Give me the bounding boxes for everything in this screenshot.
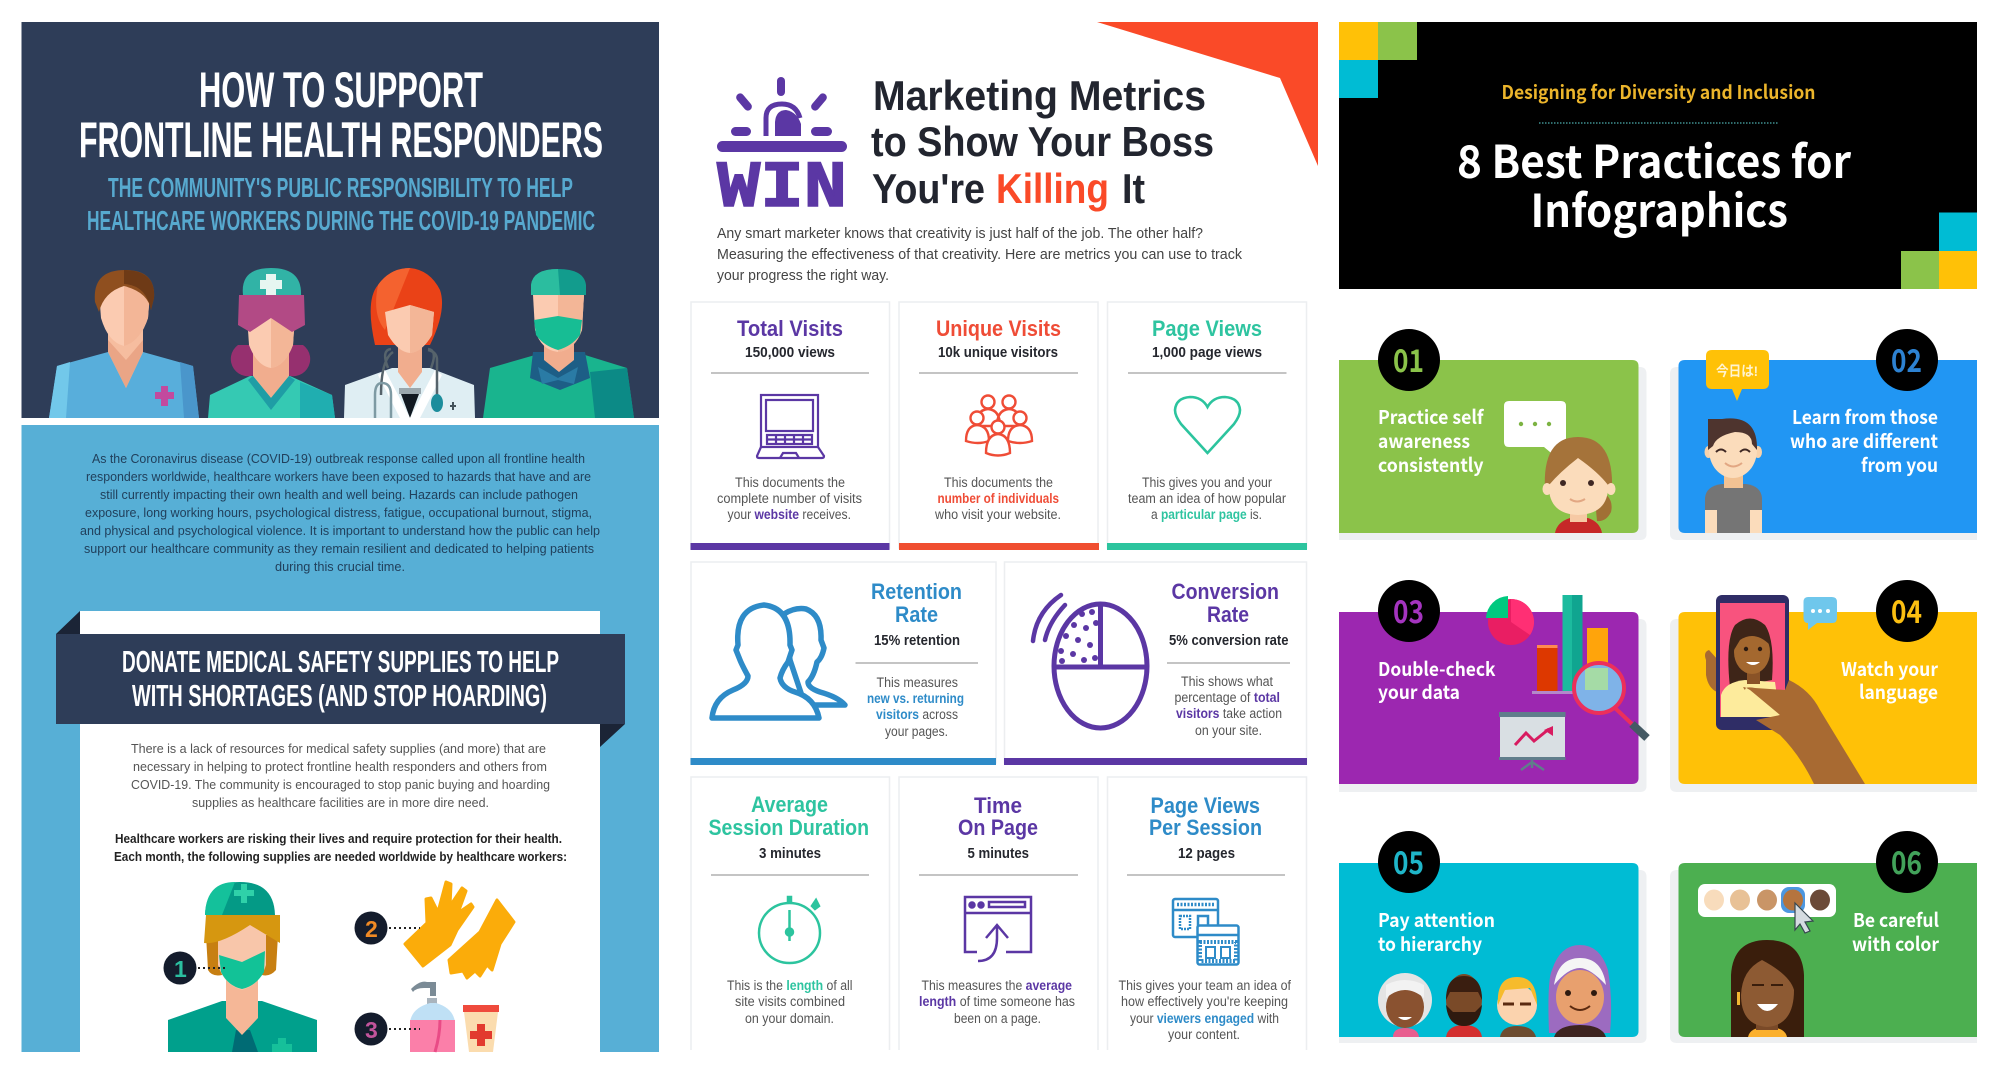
bold statement: Healthcare workers are risking their lives and require protection for their health. bbox=[115, 831, 562, 846]
chart: bars bbox=[1532, 595, 1612, 694]
icon: browser windows bbox=[1173, 899, 1238, 964]
banner title: 8 Best Practices for bbox=[1457, 126, 1851, 191]
card: page views per session: your content. bbox=[1168, 1027, 1240, 1042]
icon: presentation board bbox=[1499, 712, 1566, 770]
title: HOW TO SUPPORT bbox=[199, 62, 483, 118]
card: average session duration: site visits combined bbox=[735, 994, 845, 1009]
panel: marketing metrics bbox=[690, 22, 1318, 1050]
card 01: awareness bbox=[1378, 427, 1470, 454]
chart: pie bbox=[1486, 596, 1534, 645]
card: conversion rate: This shows what bbox=[1181, 674, 1273, 689]
figure: doctor with stethoscope bbox=[344, 268, 475, 418]
intro text: Any smart marketer knows that creativity is just half of the job. The other half? bbox=[717, 226, 1203, 242]
card: conversion rate: 5% conversion rate bbox=[1169, 633, 1288, 649]
card 05: 05 bbox=[1393, 838, 1424, 883]
card: page views per session: how effectively you're keeping bbox=[1121, 994, 1288, 1009]
card: time on page: This measures the average bbox=[922, 978, 1072, 993]
card: time on page: been on a page. bbox=[954, 1011, 1041, 1026]
card 03: your data bbox=[1378, 678, 1460, 705]
card 03: 03 bbox=[1393, 587, 1424, 632]
card 05: to hierarchy bbox=[1378, 930, 1482, 957]
card: conversion rate bbox=[1004, 562, 1307, 765]
bold statement: Each month, the following supplies are needed worldwide by healthcare workers: bbox=[114, 849, 567, 864]
card: page views: a particular page is. bbox=[1151, 507, 1262, 522]
card: retention rate: your pages. bbox=[885, 724, 948, 739]
card: conversion rate: Rate bbox=[1207, 602, 1249, 627]
intro text: Measuring the effectiveness of that creativity. Here are metrics you can use to track bbox=[717, 247, 1243, 263]
card: unique visits bbox=[899, 302, 1099, 550]
icon: yellow greeting bubble bbox=[1706, 350, 1769, 401]
title bbox=[79, 62, 603, 168]
card: page views per session bbox=[1108, 777, 1306, 1050]
icon: two busts bbox=[712, 605, 845, 718]
card: page views per session: Per Session bbox=[1149, 815, 1262, 840]
icon: heart bbox=[1175, 397, 1240, 453]
icon: laptop bbox=[757, 395, 824, 458]
card 05 bbox=[1339, 831, 1646, 1043]
illustration: phone in hand bbox=[1705, 595, 1865, 784]
title: Killing bbox=[996, 165, 1109, 212]
illustration: gloves bbox=[405, 882, 514, 978]
callout 3 bbox=[354, 1012, 420, 1046]
card: average session duration: 3 minutes bbox=[759, 846, 821, 862]
illustration: smiling woman bbox=[1731, 940, 1804, 1037]
icon: win siren: WIN bbox=[717, 151, 847, 226]
card: average session duration: This is the length of all bbox=[727, 978, 852, 993]
card: total visits: 150,000 views bbox=[745, 345, 835, 361]
card: time on page: 5 minutes bbox=[968, 846, 1029, 862]
card: unique visits: 10k unique visitors bbox=[938, 345, 1058, 361]
intro paragraph: As the Coronavirus disease (COVID-19) outbreak response called upon all frontline health bbox=[92, 451, 585, 466]
card: total visits bbox=[690, 302, 890, 550]
title: It bbox=[1122, 165, 1145, 212]
callout 1 bbox=[164, 952, 228, 984]
subtitle bbox=[87, 172, 595, 236]
banner bbox=[1339, 22, 1977, 289]
icon: magnifier bbox=[1574, 663, 1647, 738]
title: You're bbox=[872, 165, 985, 212]
title: to Show Your Boss bbox=[871, 118, 1214, 165]
card: retention rate: Rate bbox=[895, 602, 938, 627]
card 01 bbox=[1339, 329, 1646, 540]
card: retention rate: new vs. returning bbox=[867, 691, 964, 706]
icon: chat bubble bbox=[1804, 597, 1837, 630]
supplies paragraph: supplies as healthcare facilities are in more dire need. bbox=[192, 795, 489, 810]
callout 3: 3 bbox=[365, 1017, 378, 1043]
card: page views: This gives you and your bbox=[1142, 475, 1272, 490]
figure: male nurse bbox=[49, 270, 199, 418]
card: retention rate bbox=[690, 562, 996, 765]
figure: surgeon bbox=[483, 269, 634, 418]
callout 2 bbox=[354, 912, 420, 944]
card 01: 01 bbox=[1393, 336, 1424, 381]
card: average session duration bbox=[691, 777, 890, 1050]
card 04: 04 bbox=[1891, 587, 1922, 632]
callout 1: 1 bbox=[174, 956, 187, 982]
icon: browser with upload arrow bbox=[965, 897, 1031, 961]
title: FRONTLINE HEALTH RESPONDERS bbox=[79, 112, 603, 168]
icon: yellow greeting bubble: 今日は! bbox=[1716, 363, 1758, 379]
card: unique visits: who visit your website. bbox=[934, 507, 1061, 522]
card 04: language bbox=[1859, 678, 1938, 705]
card: page views: 1,000 page views bbox=[1152, 345, 1262, 361]
ribbon heading bbox=[56, 611, 625, 747]
icon: speech bubble bbox=[1504, 401, 1566, 457]
subtitle: HEALTHCARE WORKERS DURING THE COVID-19 PANDEMIC bbox=[87, 205, 595, 236]
body background bbox=[22, 425, 659, 1052]
card: retention rate: This measures bbox=[876, 675, 958, 690]
intro paragraph: still currently impacting their own health and well being. Hazards can include pathogen bbox=[100, 487, 578, 502]
card 04: Watch your bbox=[1841, 655, 1939, 682]
header background bbox=[22, 22, 659, 418]
card 01: consistently bbox=[1378, 451, 1484, 478]
ribbon heading: WITH SHORTAGES (AND STOP HOARDING) bbox=[132, 678, 547, 713]
intro paragraph: responders worldwide, healthcare workers have been exposed to hazards that have and are bbox=[86, 469, 591, 484]
card: total visits: your website receives. bbox=[728, 507, 851, 522]
icon: skin tone palette bbox=[1698, 884, 1836, 933]
intro paragraph: exposure, long working hours, psychological distress, fatigue, occupational burnout, stigma, bbox=[85, 505, 592, 520]
figure: nurse with cap bbox=[208, 268, 335, 418]
card 02: Learn from those bbox=[1792, 403, 1938, 430]
card 06 bbox=[1670, 831, 1977, 1043]
white content card bbox=[80, 611, 600, 1052]
icon: win siren bbox=[717, 77, 847, 226]
card 03 bbox=[1339, 580, 1647, 792]
card 02: from you bbox=[1861, 451, 1938, 478]
card 02: who are different bbox=[1790, 427, 1938, 454]
banner: Infographics bbox=[1530, 175, 1788, 240]
card 02: 02 bbox=[1891, 336, 1922, 381]
card: conversion rate: on your site. bbox=[1195, 723, 1262, 738]
icon: computer mouse bbox=[1033, 595, 1147, 728]
title: Marketing Metrics bbox=[873, 72, 1206, 119]
illustration: boy bbox=[1704, 418, 1762, 533]
icon: stopwatch bbox=[759, 897, 820, 963]
icon: group of people bbox=[966, 396, 1032, 456]
corner triangle bbox=[1097, 22, 1318, 166]
intro text: your progress the right way. bbox=[717, 268, 889, 284]
panel: best practices bbox=[1339, 22, 1977, 1043]
supplies paragraph: There is a lack of resources for medical safety supplies (and more) that are bbox=[131, 741, 546, 756]
card: time on page: Time bbox=[974, 793, 1022, 818]
card: page views: Page Views bbox=[1152, 316, 1262, 341]
banner subtitle: Designing for Diversity and Inclusion bbox=[1502, 78, 1816, 105]
card: page views per session: your viewers engaged with bbox=[1130, 1011, 1279, 1026]
card 02 bbox=[1670, 329, 1977, 540]
callout 2: 2 bbox=[365, 916, 378, 942]
card: time on page: length of time someone has bbox=[919, 994, 1075, 1009]
card: time on page bbox=[899, 777, 1098, 1050]
card: page views bbox=[1107, 302, 1307, 550]
card 06: 06 bbox=[1891, 838, 1922, 883]
card: conversion rate: Conversion bbox=[1172, 579, 1279, 604]
card: average session duration: Session Duration bbox=[708, 815, 869, 840]
card: unique visits: number of individuals bbox=[938, 491, 1059, 506]
card: total visits: This documents the bbox=[735, 475, 845, 490]
card: conversion rate: percentage of total bbox=[1174, 690, 1280, 705]
card: retention rate: 15% retention bbox=[874, 633, 960, 649]
intro paragraph: during this crucial time. bbox=[275, 559, 405, 574]
supplies paragraph: necessary in helping to protect frontline health responders and others from bbox=[133, 759, 547, 774]
illustration: girl bbox=[1542, 437, 1616, 533]
card 01: Practice self bbox=[1378, 403, 1484, 430]
intro paragraph bbox=[80, 451, 600, 574]
panel: frontline health responders bbox=[22, 22, 659, 1052]
card: time on page: On Page bbox=[958, 815, 1038, 840]
intro paragraph: support our healthcare community as they remain resilient and dedicated to helping patients bbox=[84, 541, 594, 556]
card: page views per session: 12 pages bbox=[1178, 846, 1235, 862]
card 05: Pay attention bbox=[1378, 906, 1495, 933]
card 06: with color bbox=[1852, 930, 1940, 957]
title bbox=[871, 72, 1214, 212]
supplies paragraph: COVID-19. The community is encouraged to stop panic buying and hoarding bbox=[131, 777, 550, 792]
illustration: masked health worker bbox=[168, 882, 317, 1052]
card: retention rate: Retention bbox=[871, 579, 962, 604]
card 04 bbox=[1670, 580, 1977, 792]
illustration: sanitizer and cream bbox=[410, 982, 499, 1052]
card: total visits: complete number of visits bbox=[717, 491, 862, 506]
card: average session duration: on your domain. bbox=[745, 1011, 834, 1026]
card: page views: team an idea of how popular bbox=[1128, 491, 1286, 506]
card: unique visits: Unique Visits bbox=[936, 316, 1061, 341]
card: conversion rate: visitors take action bbox=[1176, 706, 1282, 721]
card 06: Be careful bbox=[1853, 906, 1939, 933]
intro paragraph: and physical and psychological violence. It is important to understand how the public can help bbox=[80, 523, 600, 538]
card: average session duration: Average bbox=[751, 792, 828, 817]
card: page views per session: This gives your team an idea of bbox=[1118, 978, 1291, 993]
bold statement bbox=[114, 831, 567, 864]
illustration: diverse people bbox=[1378, 945, 1611, 1037]
card: unique visits: This documents the bbox=[944, 475, 1053, 490]
ribbon heading: DONATE MEDICAL SAFETY SUPPLIES TO HELP bbox=[122, 644, 559, 679]
subtitle: THE COMMUNITY'S PUBLIC RESPONSIBILITY TO HELP bbox=[108, 172, 573, 203]
intro text bbox=[717, 226, 1243, 284]
card: total visits: Total Visits bbox=[737, 316, 843, 341]
supplies paragraph bbox=[131, 741, 550, 810]
card: page views per session: Page Views bbox=[1150, 793, 1260, 818]
card 03: Double-check bbox=[1378, 655, 1496, 682]
card: retention rate: visitors across bbox=[876, 707, 958, 722]
